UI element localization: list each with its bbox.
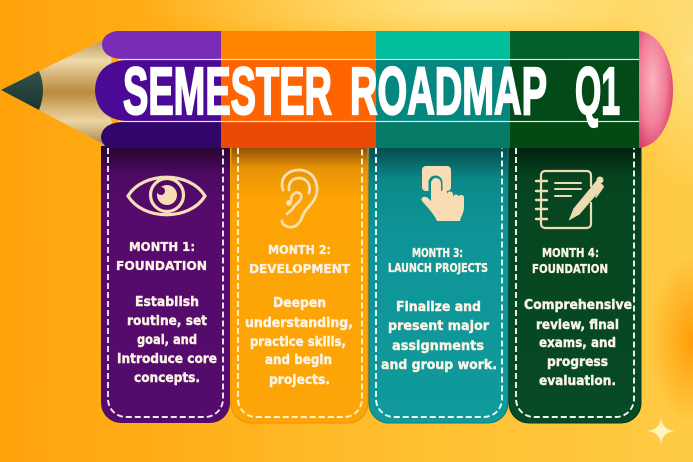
heading: month 4 — [532, 246, 608, 276]
text: month 4 description: Comprehensive — [524, 297, 632, 313]
text: month 4 description — [524, 297, 632, 389]
title: Q1 — [575, 54, 620, 129]
icon: tapping hand — [421, 166, 464, 221]
text: month 2 description — [245, 295, 353, 388]
pencil body: green section — [510, 31, 639, 148]
heading: month 4: FOUNDATION — [532, 262, 608, 276]
text: month 3 description: present major — [388, 318, 489, 334]
text: month 1 description: Introduce core — [117, 351, 217, 367]
heading: month 2: MONTH 2: — [268, 243, 331, 257]
text: month 4 description: evaluation. — [539, 373, 616, 389]
icon: sparkle — [647, 417, 675, 445]
eraser — [639, 31, 673, 148]
panel: month 3 card — [369, 146, 508, 423]
heading: month 2 — [249, 243, 351, 276]
pencil body: purple section — [95, 31, 221, 148]
panel: month 1 card — [101, 146, 230, 423]
icon: eye — [128, 177, 205, 215]
text: month 4 description: progress — [547, 354, 608, 370]
heading: month 1: FOUNDATION — [116, 259, 207, 273]
text: month 2 description: Deepen — [273, 295, 326, 311]
text: month 3 description: and group work. — [381, 357, 497, 373]
text: month 1 description: Establish — [135, 294, 199, 310]
pencil graphite point — [1, 71, 43, 110]
text: month 2 description: understanding, — [245, 315, 353, 331]
pencil graphic — [1, 31, 673, 148]
title: ROADMAP — [350, 54, 547, 129]
text: month 3 description: Finalize and — [396, 299, 481, 315]
pencil body: orange section — [221, 31, 376, 148]
text: month 2 description: practice skills, — [250, 334, 346, 350]
text: month 4 description: exams, and — [539, 335, 616, 351]
heading: month 3: LAUNCH PROJECTS — [388, 261, 488, 275]
text: month 2 description: projects. — [269, 372, 330, 388]
heading: month 2: DEVELOPMENT — [249, 262, 351, 276]
text: month 4 description: review, final — [536, 317, 619, 333]
text: month 3 description: assignments — [392, 338, 484, 354]
panel: month 4 card — [509, 146, 641, 423]
icon: ear — [282, 170, 317, 227]
text: month 1 description: concepts. — [134, 370, 200, 386]
pencil body: teal section — [376, 31, 510, 148]
heading: month 4: MONTH 4: — [542, 246, 599, 260]
icon: notebook and pen — [536, 171, 604, 228]
text: month 2 description: and begin — [265, 352, 332, 368]
heading: month 1: MONTH 1: — [129, 240, 195, 254]
heading: month 3: MONTH 3: — [412, 246, 463, 260]
text: month 1 description: routine, set — [127, 313, 207, 329]
panel: month 2 card — [231, 146, 368, 423]
heading: month 1 — [116, 240, 207, 273]
text: month 1 description: goal, and — [137, 332, 197, 348]
title: SEMESTER — [123, 54, 332, 129]
text: month 1 description — [117, 294, 217, 386]
text: month 3 description — [381, 299, 497, 373]
heading: month 3 — [388, 246, 488, 275]
pencil wood tip — [39, 40, 112, 144]
